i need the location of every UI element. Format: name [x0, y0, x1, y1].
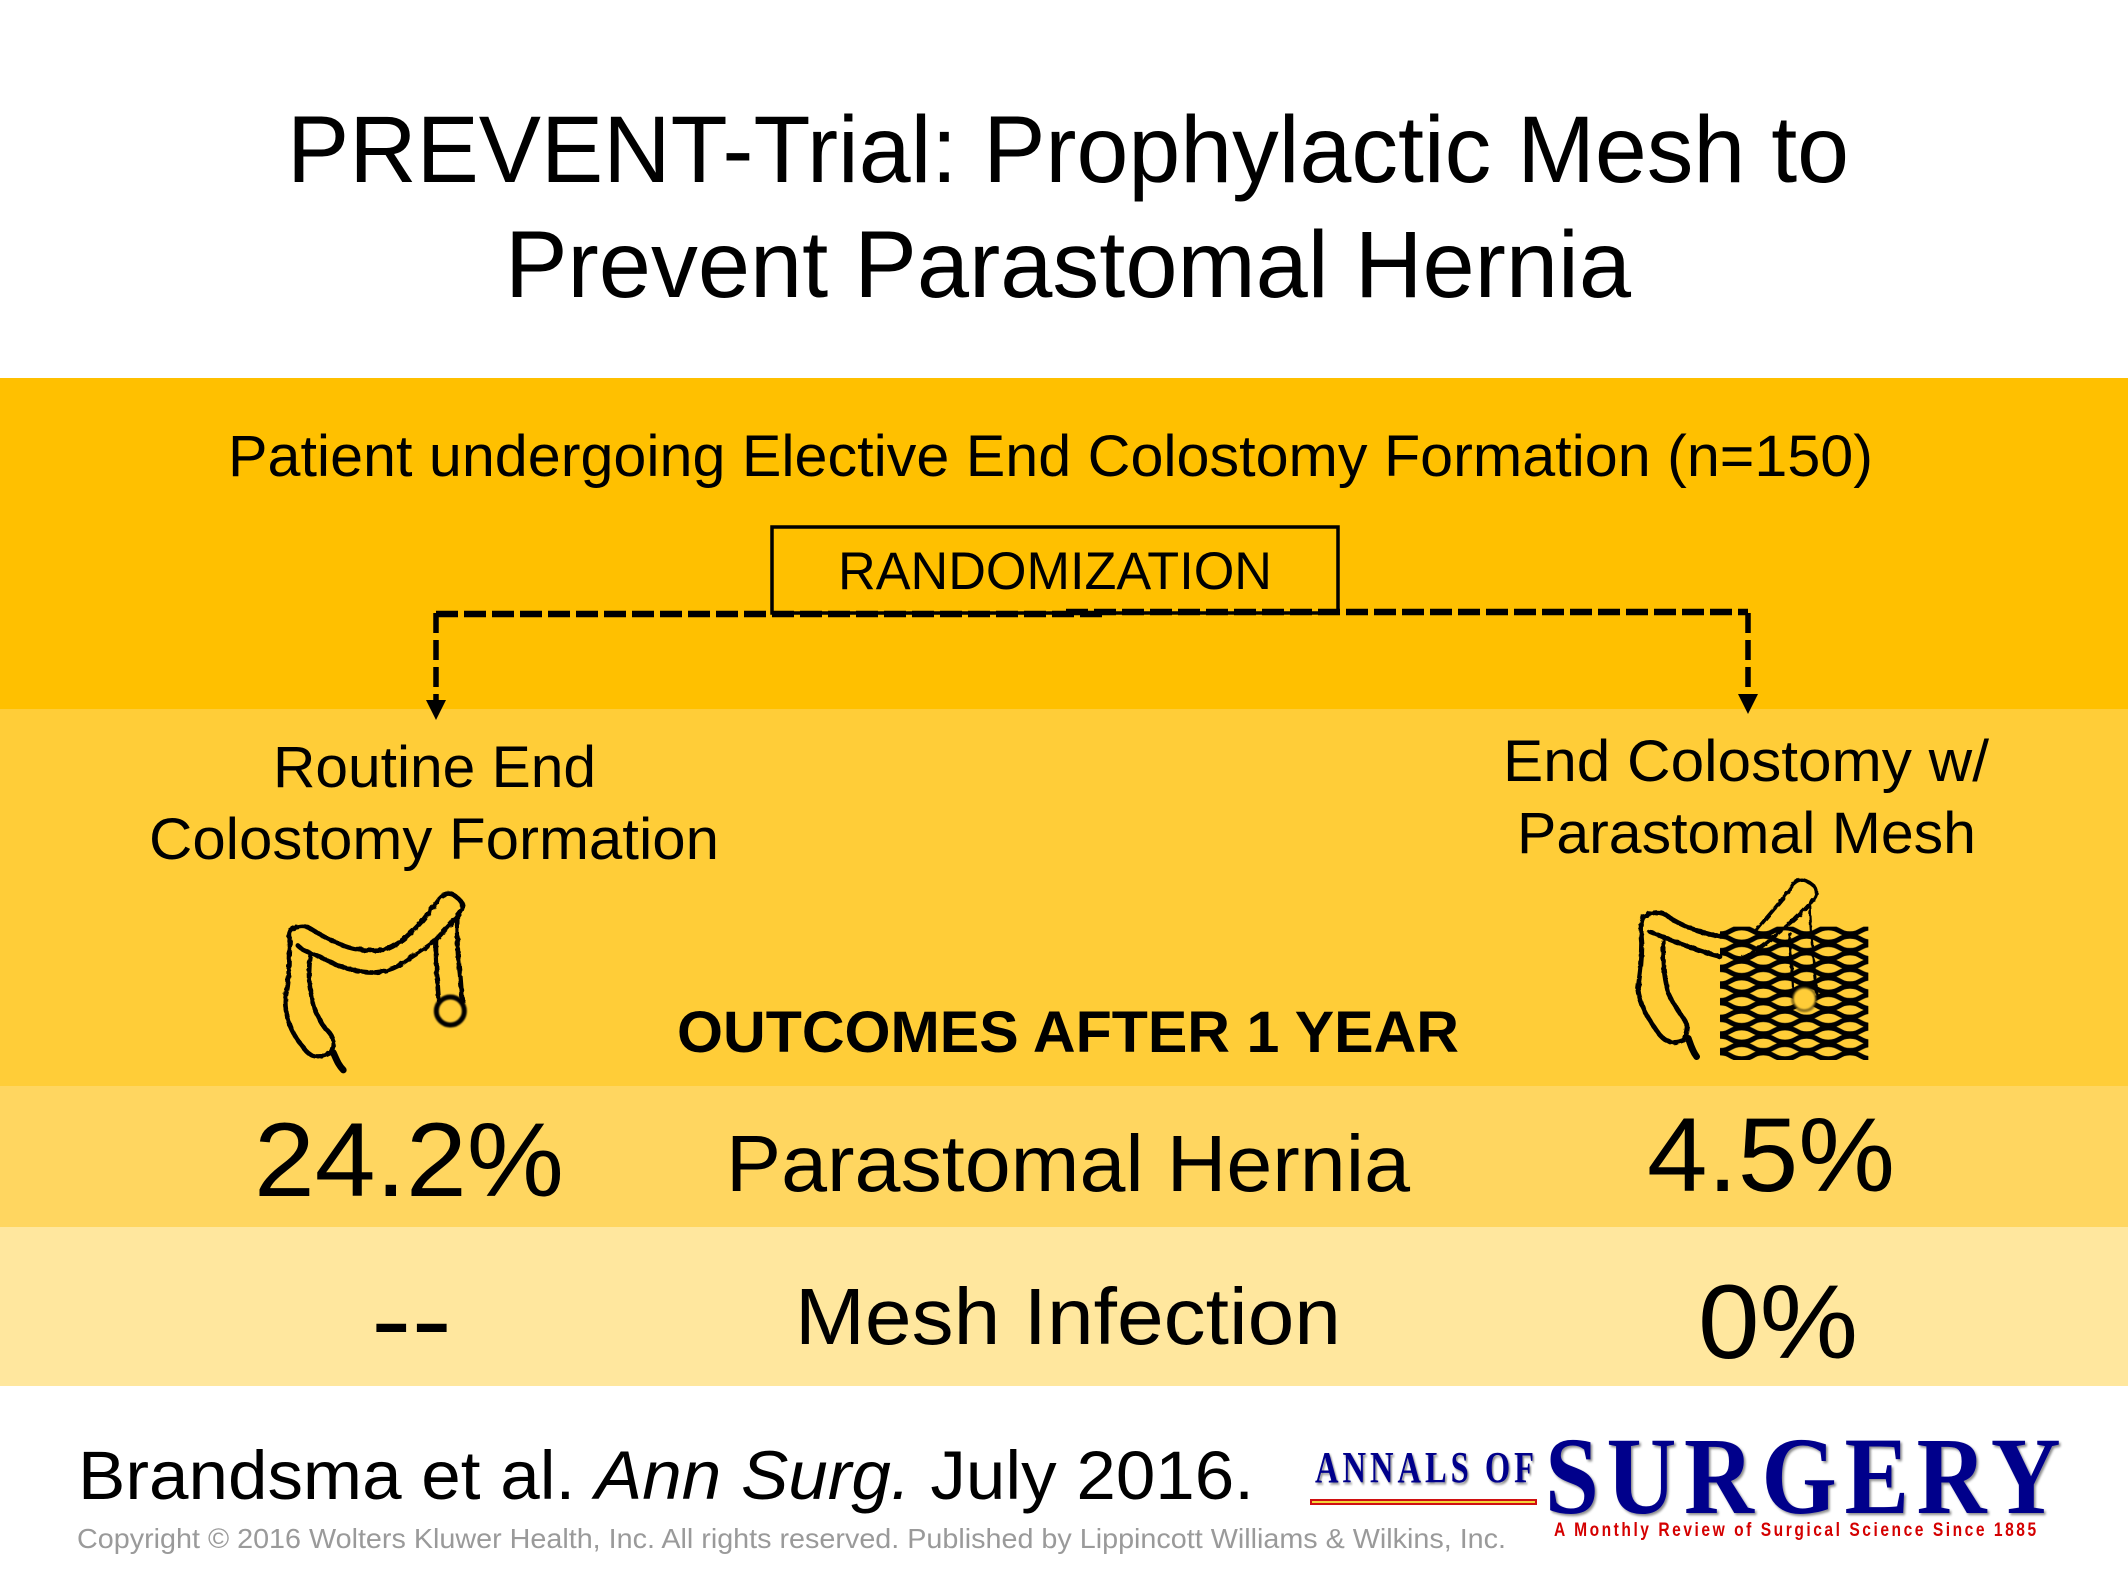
citation: Brandsma et al. Ann Surg. July 2016. [78, 1437, 1254, 1514]
icon: colon with end colostomy [285, 894, 464, 1070]
mesh arm mesh infection rate: 0% [1698, 1264, 1858, 1381]
logo: Annals of Surgery: SURGERY [1545, 1416, 2061, 1537]
right arm label: Parastomal Mesh [1517, 801, 1976, 866]
copyright: Copyright © 2016 Wolters Kluwer Health, Inc. All rights reserved. Published by Lippincott Williams & Wilkins, Inc. [77, 1523, 1506, 1554]
logo: Annals of Surgery: ANNALS OF [1315, 1444, 1534, 1492]
right arm label: End Colostomy w/ [1503, 729, 1990, 794]
panel: parastomal hernia row [0, 1086, 2128, 1227]
outcomes heading: OUTCOMES AFTER 1 YEAR [677, 1000, 1459, 1065]
randomization box: RANDOMIZATION [838, 542, 1272, 601]
randomization box [772, 527, 1338, 613]
panel: mesh infection row [0, 1227, 2128, 1386]
routine colostomy parastomal hernia rate: 24.2% [254, 1102, 564, 1219]
left arm label: Routine End [273, 735, 596, 800]
panel: trial arms band [0, 709, 2128, 1086]
mesh infection label: Mesh Infection [795, 1272, 1341, 1361]
title: PREVENT-Trial: Prophylactic Mesh to [287, 97, 1849, 203]
left arm label: Colostomy Formation [149, 807, 719, 872]
left arm label [149, 735, 719, 872]
arrow: randomization to both arms [426, 612, 1758, 720]
title [287, 97, 1849, 318]
title: Prevent Parastomal Hernia [505, 212, 1631, 318]
logo: Annals of Surgery: A Monthly Review of Surgical Science Since 1885 [1554, 1519, 2036, 1540]
right arm label [1503, 729, 1990, 866]
patient population text: Patient undergoing Elective End Colostomy Formation (n=150) [228, 424, 1873, 489]
routine colostomy mesh infection value: -- [371, 1262, 452, 1379]
logo: Annals of Surgery [1310, 1416, 2061, 1540]
icon: colon with parastomal mesh [1638, 880, 1868, 1060]
panel: enrollment band [0, 378, 2128, 709]
parastomal hernia label: Parastomal Hernia [726, 1119, 1411, 1208]
mesh parastomal hernia rate: 4.5% [1647, 1097, 1895, 1214]
